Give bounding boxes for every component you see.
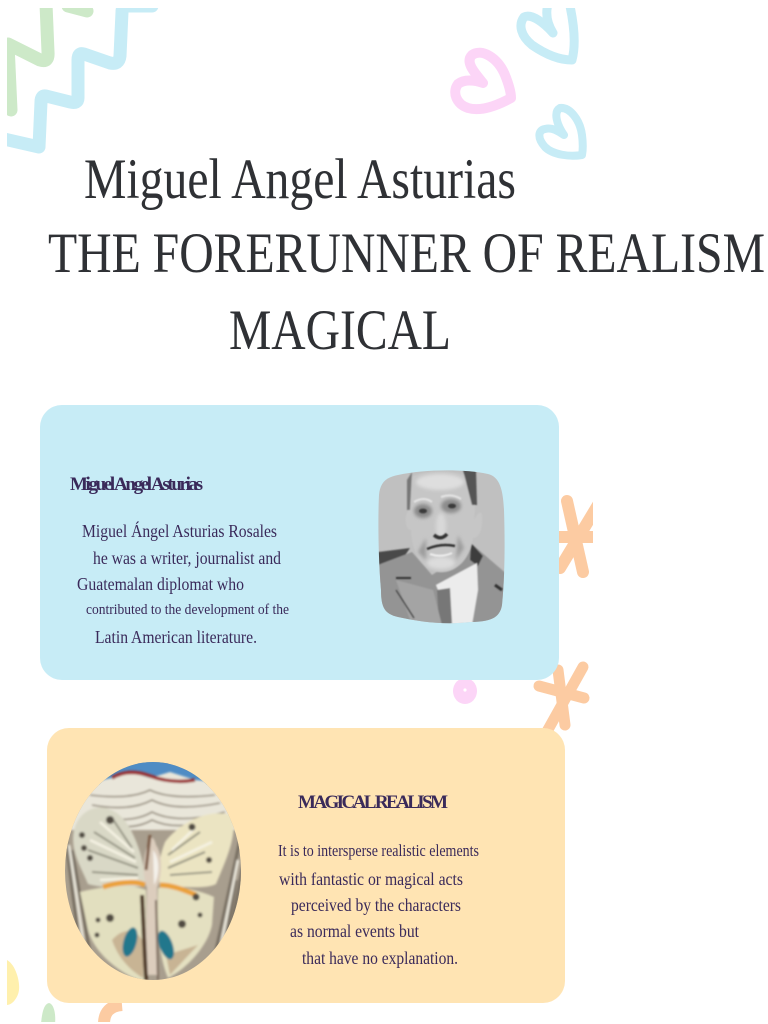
decoration: green zigzag (8, 4, 87, 110)
decoration: pink dot (453, 678, 477, 704)
decoration: peach star lower (539, 667, 584, 735)
biography text: Miguel Ángel Asturias Rosales (82, 521, 277, 541)
title (48, 148, 765, 362)
decoration: peach arc (104, 1005, 122, 1024)
biography text: Latin American literature. (95, 627, 257, 647)
definition text: perceived by the characters (291, 895, 461, 915)
decoration: blue heart bottom (539, 108, 583, 156)
decoration: blue heart top (521, 4, 574, 60)
definition text: It is to intersperse realistic elements (278, 841, 479, 860)
background decorations (4, 4, 598, 1024)
panel: Magical Realism (47, 728, 565, 1003)
biography text: he was a writer, journalist and (93, 548, 281, 568)
title: MAGICAL (229, 299, 451, 362)
butterfly painting (65, 762, 241, 980)
panel background orange (47, 728, 565, 1003)
panel background blue (40, 405, 559, 680)
biography text: contributed to the development of the (86, 602, 289, 618)
decoration: pink heart (455, 53, 511, 109)
decoration: green shape (41, 1003, 55, 1024)
definition text (278, 841, 479, 968)
panel: Miguel Angel Asturias (40, 405, 559, 680)
title: Miguel Angel Asturias (84, 148, 516, 211)
heading: Magical Realism: MAGICAL REALISM (298, 792, 448, 813)
biography text (77, 521, 289, 647)
definition text: with fantastic or magical acts (279, 869, 463, 889)
decoration: yellow shape (7, 960, 19, 1005)
portrait photo (378, 470, 505, 624)
heading: Miguel Angel Asturias: Miguel Angel Asturias (70, 474, 203, 495)
definition text: that have no explanation. (302, 948, 458, 968)
decoration: blue zigzag (4, 6, 152, 147)
definition text: as normal events but (290, 921, 419, 941)
decoration: peach star upper (555, 501, 598, 572)
biography text: Guatemalan diplomat who (77, 574, 244, 594)
